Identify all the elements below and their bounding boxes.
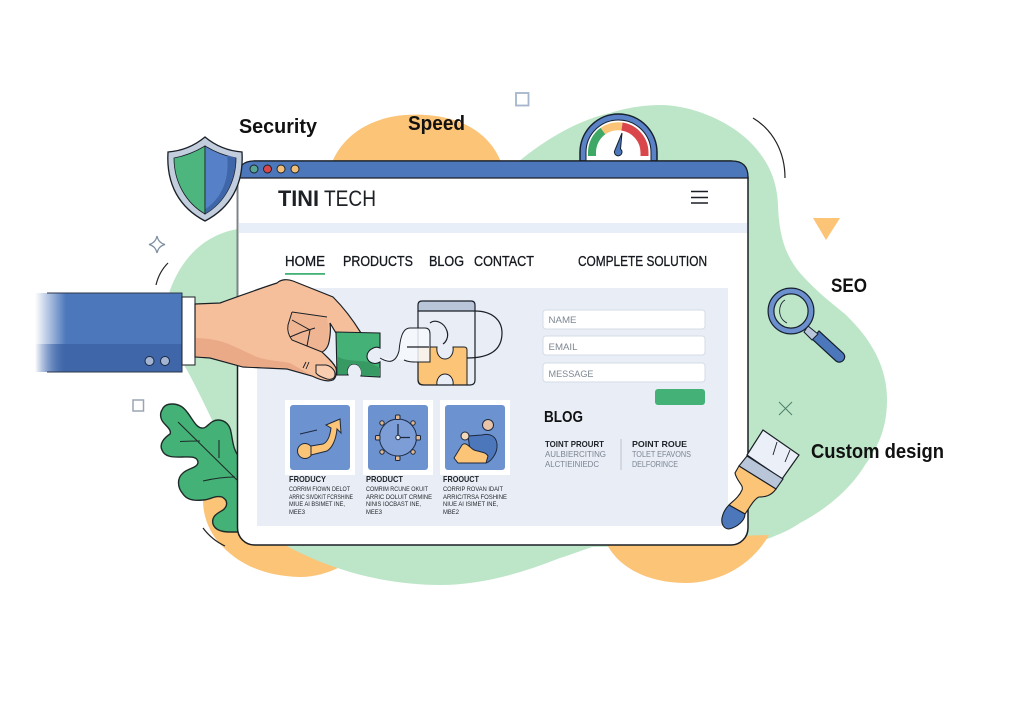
square outline top xyxy=(516,93,528,106)
blog column 2 xyxy=(632,439,691,469)
card 2 text: ARRIC DOLUIT CRMINE xyxy=(366,495,432,501)
active nav underline xyxy=(285,273,325,275)
background blobs xyxy=(167,105,887,585)
fist shading xyxy=(288,313,329,352)
gauge needle xyxy=(614,133,622,156)
blog column 1: AULBIERCITING xyxy=(545,450,606,459)
shield shade xyxy=(206,155,236,214)
navigation: BLOG xyxy=(429,254,464,270)
product card 2 xyxy=(363,400,433,475)
card text: CORRIM FIOWN DELOT xyxy=(289,487,350,493)
blog divider xyxy=(620,439,622,470)
puzzle shade xyxy=(337,356,380,376)
blob: top orange xyxy=(331,115,502,165)
card 2 text: MEE3 xyxy=(366,510,383,516)
shield green half xyxy=(174,146,205,214)
logo xyxy=(278,186,376,211)
submit button xyxy=(655,389,705,405)
gauge arcs xyxy=(592,126,644,156)
card text: MIUE AI BSIMET INE, xyxy=(289,502,345,508)
card text: ARRIC SIVDKIT FCRSHINE xyxy=(289,495,353,501)
arc top right xyxy=(753,118,785,178)
card 2 text: NINIS IOCBAST INE, xyxy=(366,502,421,508)
product card 1 xyxy=(285,400,355,516)
window body xyxy=(238,161,748,545)
blog heading: BLOG xyxy=(544,409,583,426)
blog column 1: TOINT PROURT xyxy=(545,439,605,449)
card text: NIUE AI ISIMET INE, xyxy=(443,502,498,508)
blog column 1: ALCTIEINIEDC xyxy=(545,460,599,469)
logo: TECH xyxy=(324,186,376,211)
title bar xyxy=(238,161,748,178)
card 2 text: COMRIM RCUNE OKUIT xyxy=(366,487,428,493)
icon: clock xyxy=(376,415,420,460)
label: Custom design: Custom design xyxy=(811,440,944,463)
orange triangle xyxy=(813,218,840,240)
thumb nail xyxy=(316,365,335,379)
card text: FRODUCY xyxy=(289,474,326,484)
card text: CORRIP ROVAN IDAIT xyxy=(443,487,503,493)
blog column 1 xyxy=(545,439,606,469)
icon: growth arrow xyxy=(298,419,341,458)
blog section xyxy=(544,409,691,470)
label: SEO: SEO xyxy=(831,276,867,297)
brush ferrule xyxy=(739,456,783,489)
icon: paint brush xyxy=(722,430,799,529)
icon: hand holding puzzle xyxy=(35,280,380,381)
finger lines xyxy=(288,312,327,352)
content panel xyxy=(257,288,728,526)
arc left xyxy=(156,263,168,285)
decorative shapes xyxy=(133,93,840,546)
form xyxy=(543,310,705,405)
icon: magnifier xyxy=(771,291,845,362)
orange puzzle piece xyxy=(418,347,467,385)
hand shadow xyxy=(196,338,311,375)
bristle lines xyxy=(773,442,790,462)
arc below leaf xyxy=(203,528,225,546)
navigation: PRODUCTS xyxy=(343,254,413,270)
card 2 text xyxy=(366,474,432,516)
hamburger menu xyxy=(691,192,708,203)
hand xyxy=(195,280,361,381)
message field xyxy=(543,363,705,382)
card text xyxy=(443,474,507,516)
green puzzle piece xyxy=(336,332,380,377)
icon: security shield xyxy=(168,137,242,221)
blog column 2: POINT ROUE xyxy=(632,439,687,449)
card text: ARRIC/TRSA FOSHINE xyxy=(443,495,507,501)
puzzle illustration xyxy=(380,301,502,385)
connector piece xyxy=(380,328,430,362)
icon: person at desk xyxy=(454,420,497,463)
left edge highlight xyxy=(237,178,238,328)
window control dots xyxy=(250,165,299,173)
email field: EMAIL xyxy=(548,342,578,353)
name field xyxy=(543,310,705,329)
knuckle lines xyxy=(303,362,309,369)
email field xyxy=(543,336,705,355)
brush handle xyxy=(729,466,776,514)
icon: speed gauge xyxy=(580,114,657,161)
navigation xyxy=(285,254,707,270)
logo: TINI xyxy=(278,186,319,211)
blog column 2: TOLET EFAVONS xyxy=(632,450,691,459)
blob: main green xyxy=(260,105,887,585)
brush bristles xyxy=(747,430,799,479)
header band xyxy=(239,223,747,233)
name field: NAME xyxy=(548,315,576,326)
sleeve xyxy=(35,293,182,372)
navigation: COMPLETE SOLUTION xyxy=(578,254,707,270)
message field: MESSAGE xyxy=(548,369,594,380)
blog column 2: DELFORINCE xyxy=(632,460,678,469)
product card 3 xyxy=(440,400,510,516)
connector dash xyxy=(407,346,429,348)
navigation: CONTACT xyxy=(474,254,534,270)
card 2 text: PRODUCT xyxy=(366,474,404,484)
card text: FROOUCT xyxy=(443,474,480,484)
icon: leaf xyxy=(161,404,240,532)
card text: MEE3 xyxy=(289,510,306,516)
blob: lower left orange xyxy=(203,480,340,577)
browser window xyxy=(237,161,748,545)
label: Speed: Speed xyxy=(408,112,465,135)
blob: lower right orange xyxy=(605,535,769,583)
square outline left xyxy=(133,400,144,411)
shirt cuff xyxy=(182,297,195,365)
mug outline xyxy=(418,301,502,385)
brush tip xyxy=(722,505,745,529)
sparkle xyxy=(149,236,165,253)
blob: left green xyxy=(167,228,320,480)
cross mark xyxy=(779,402,792,415)
label: Security: Security xyxy=(239,115,318,138)
navigation: HOME xyxy=(285,254,325,270)
card text: MBE2 xyxy=(443,510,460,516)
shield blue half xyxy=(205,146,236,214)
card text xyxy=(289,474,353,516)
